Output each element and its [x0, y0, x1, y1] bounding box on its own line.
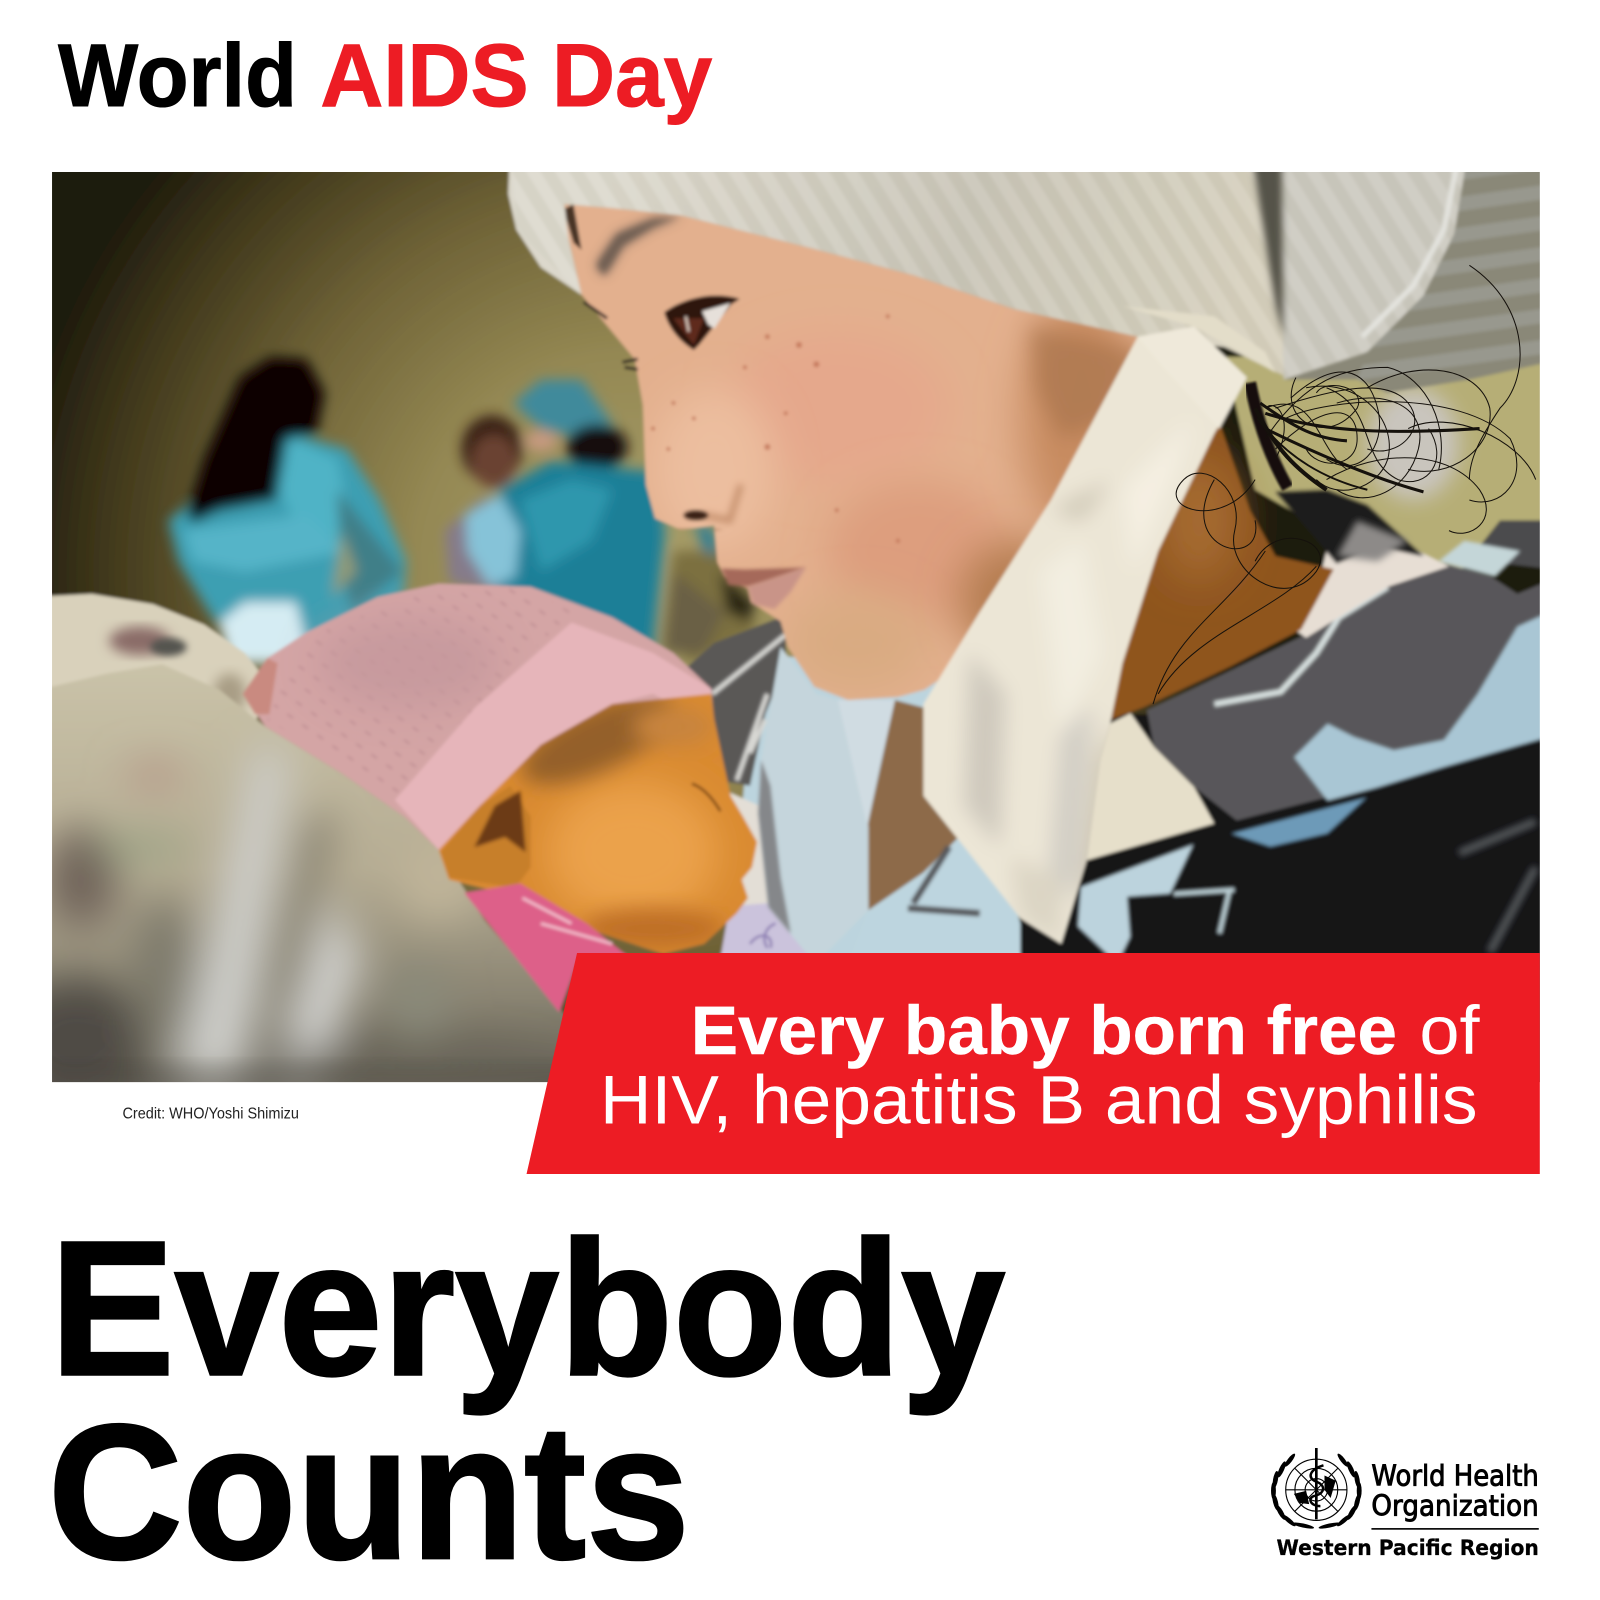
far eye lashes [584, 302, 638, 369]
mother's face [563, 202, 1139, 702]
photo: mother and newborn baby [52, 172, 1540, 1082]
headline: Everybody Counts [48, 1200, 1005, 1599]
photo credit: Credit: WHO/Yoshi Shimizu [122, 1105, 299, 1122]
eye [664, 296, 740, 350]
pink onesie [464, 884, 638, 1012]
header: World AIDS Day: Day [552, 26, 712, 125]
right side fleece robe [1018, 713, 1540, 953]
head wrap [505, 172, 1286, 376]
banner text: second line: HIV, hepatitis B and syphilis [600, 1062, 1478, 1138]
bottom vignette [152, 1060, 346, 1082]
tied white cloth [920, 336, 1220, 946]
headline: Everybody Counts: Everybody [50, 1200, 1005, 1415]
pink baby hat [243, 584, 714, 850]
banner text: first line: Every baby born free [691, 993, 1397, 1069]
red banner: of [1419, 993, 1481, 1069]
blue collar and grey robe [730, 653, 1031, 959]
front blanket [52, 664, 564, 1082]
right wall behind hair [1226, 354, 1540, 570]
baby face [438, 692, 759, 953]
organization name: Organization [1371, 1488, 1539, 1522]
header: World AIDS Day: AIDS [320, 26, 529, 125]
organization name [1371, 1459, 1539, 1522]
headline: Everybody Counts: Counts [48, 1384, 690, 1599]
blurred background figures [168, 357, 755, 663]
nostril [684, 510, 708, 520]
freckles [651, 314, 900, 543]
neck [1111, 408, 1334, 719]
WHO Western Pacific Region logo [1271, 1448, 1539, 1561]
back shoulder blanket [52, 590, 260, 720]
region name: Western Pacific Region [1277, 1536, 1539, 1561]
WHO emblem [1271, 1448, 1362, 1530]
loose hair strands [1153, 265, 1536, 704]
header: World AIDS Day: World [58, 26, 297, 125]
organization name: World Health [1371, 1459, 1539, 1493]
red banner [527, 953, 1540, 1174]
lips [721, 567, 806, 609]
header: World AIDS Day [58, 26, 712, 125]
